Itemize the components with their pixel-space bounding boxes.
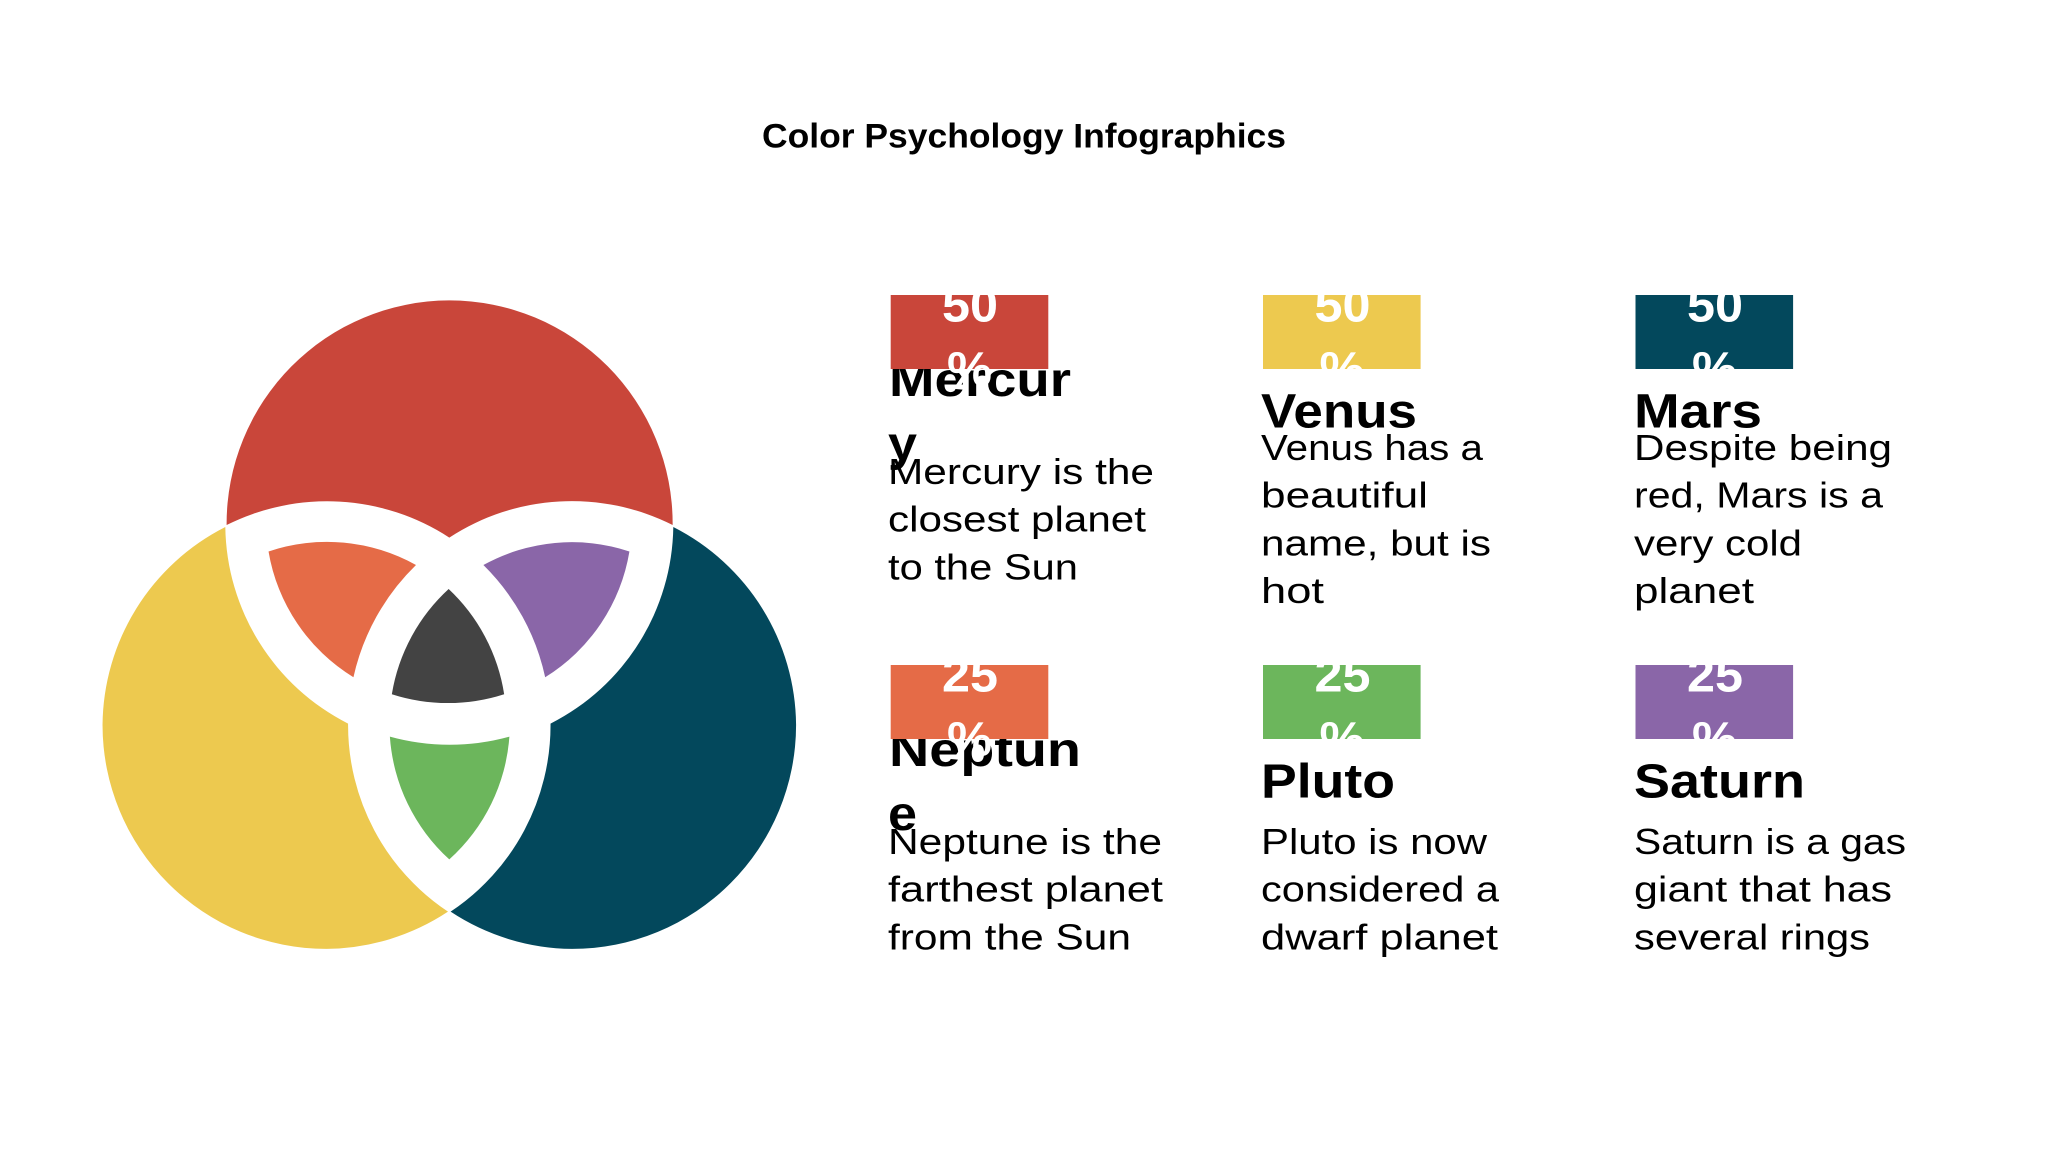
description: Venus: beautiful <box>1261 475 1428 516</box>
heading: Saturn: Saturn <box>1634 756 1805 809</box>
overlap: orange <box>269 542 416 677</box>
panel: Venus <box>1261 280 1491 611</box>
description: Saturn: Saturn is a gas <box>1634 821 1906 862</box>
overlap: dark centre <box>392 589 504 703</box>
badge: 50% red <box>891 280 1048 397</box>
description: Pluto: considered a <box>1261 869 1500 910</box>
panel: Pluto <box>1261 650 1500 957</box>
circle segment: yellow <box>103 527 448 949</box>
description: Mars: red, Mars is a <box>1634 475 1884 516</box>
badge: 25% purple <box>1636 650 1793 767</box>
badge: 50% yellow: 50 <box>1314 280 1370 333</box>
badge: 25% purple: % <box>1692 714 1737 767</box>
heading: Neptune: Neptun <box>889 724 1081 777</box>
panel: Neptune <box>888 650 1163 957</box>
description: Mars: Despite being <box>1634 427 1892 468</box>
description: Neptune: from the Sun <box>888 916 1131 957</box>
overlap: green <box>390 737 509 859</box>
badge: 50% dark blue <box>1636 280 1793 397</box>
description: Mercury: closest planet <box>888 499 1146 540</box>
badge: 25% green <box>1263 650 1421 767</box>
badge: 50% red: 50 <box>942 280 998 333</box>
description: Venus: hot <box>1261 570 1324 611</box>
heading wrap: Neptune: e <box>888 788 917 841</box>
description: Mars: planet <box>1634 570 1754 611</box>
badge: 25% green: % <box>1320 714 1364 767</box>
description: Mars: very cold <box>1634 522 1802 563</box>
circle segment: dark blue <box>451 527 796 949</box>
title: Color Psychology Infographics <box>762 118 1286 156</box>
description: Pluto: dwarf planet <box>1261 916 1498 957</box>
badge: 25% green: 25 <box>1314 650 1370 703</box>
heading: Venus: Venus <box>1261 386 1417 439</box>
badge: 25% purple: 25 <box>1687 650 1743 703</box>
badge: 50% red: % <box>947 344 992 397</box>
panel: Mars <box>1634 280 1892 611</box>
heading: Mercury: Mercur <box>889 354 1071 407</box>
description: Saturn: giant that has <box>1634 869 1892 910</box>
description: Neptune: Neptune is the <box>888 821 1162 862</box>
description: Mercury: Mercury is the <box>888 451 1154 492</box>
badge: 50% yellow <box>1263 280 1421 397</box>
badge: 50% dark blue: % <box>1692 344 1737 397</box>
heading: Pluto: Pluto <box>1261 756 1395 809</box>
badge: 25% orange: % <box>947 714 992 767</box>
heading wrap: Mercury: y <box>888 418 917 471</box>
panel: Saturn <box>1634 650 1906 957</box>
description: Venus: Venus has a <box>1261 427 1484 468</box>
heading: Mars: Mars <box>1634 386 1762 439</box>
badge: 25% orange <box>891 650 1048 767</box>
description: Venus: name, but is <box>1261 522 1491 563</box>
description: Mercury: to the Sun <box>888 546 1078 587</box>
badge: 50% dark blue: 50 <box>1687 280 1743 333</box>
description: Neptune: farthest planet <box>888 869 1163 910</box>
description: Pluto: Pluto is now <box>1261 821 1488 862</box>
venn diagram <box>103 300 796 949</box>
description: Saturn: several rings <box>1634 916 1870 957</box>
badge: 25% orange: 25 <box>942 650 998 703</box>
panel: Mercury <box>888 280 1154 587</box>
badge: 50% yellow: % <box>1320 344 1364 397</box>
overlap: purple <box>483 542 629 677</box>
circle segment: red <box>227 300 673 538</box>
